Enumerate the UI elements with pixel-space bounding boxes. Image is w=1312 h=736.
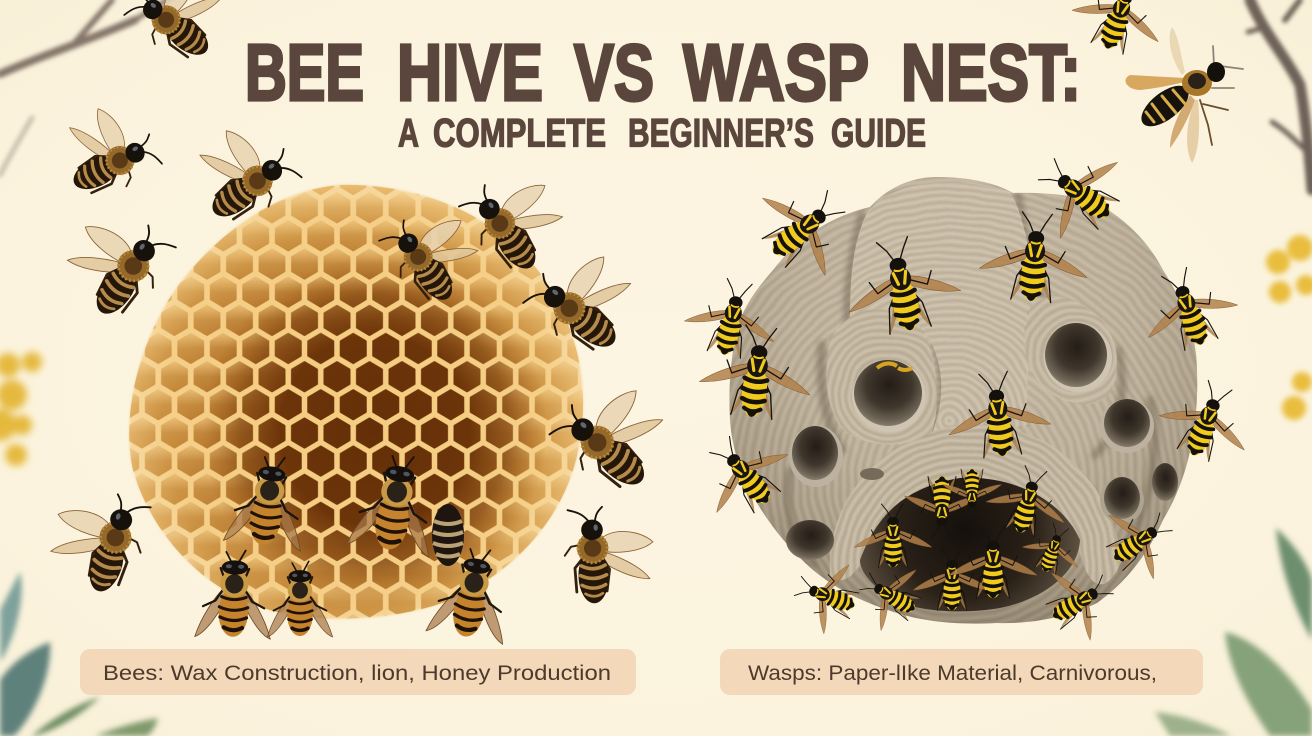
title line 1: WASP [683, 28, 869, 117]
wasp right edge [1130, 255, 1246, 361]
bee lower left [39, 479, 156, 600]
wasp bottom right [1034, 551, 1128, 650]
wasp left edge upper [679, 271, 785, 365]
title line 1: VS [574, 28, 654, 117]
bee lower right [563, 505, 655, 604]
right yellow flowers [1266, 235, 1312, 420]
left yellow flowers [0, 352, 42, 466]
nest mouth [860, 478, 1080, 611]
bee mid left [51, 196, 181, 328]
wasp upper centre right [977, 208, 1092, 306]
fibre rings over whole nest [725, 170, 1205, 630]
wasps [679, 0, 1263, 650]
bee bottom centre [267, 561, 333, 637]
wasp nest [725, 170, 1205, 630]
bottom-left leaves [0, 572, 158, 736]
caption: bees [80, 649, 636, 695]
bee top [120, 0, 241, 72]
insect flying top right [1125, 27, 1243, 163]
top-left blurred branches [0, 0, 175, 175]
wasp upper centre left [837, 229, 966, 341]
wasp lower right [1092, 491, 1189, 591]
left tube lobe [826, 309, 937, 445]
title line 2: BEGINNER’S [628, 112, 814, 156]
wasp left edge middle [696, 320, 817, 424]
title line 1: NEST: [901, 28, 1081, 117]
wasps in mouth [847, 458, 1089, 640]
bee abdomen on comb [432, 504, 464, 566]
bee right upper [519, 234, 651, 365]
title line 1 [245, 28, 1081, 117]
honey bees [39, 0, 684, 644]
top-right blurred branches [1248, 0, 1312, 190]
central dome lobe [850, 182, 1038, 440]
wasp nest top left [743, 163, 868, 292]
bee upper left centre [180, 110, 306, 234]
title line 2: A [398, 112, 419, 156]
nest holes [786, 323, 1178, 560]
wasp right edge lower [1150, 368, 1263, 472]
lobe shadows [788, 195, 1155, 565]
title line 2: GUIDE [831, 112, 926, 156]
wasp bottom left [785, 551, 867, 640]
title line 2: COMPLETE [433, 112, 606, 156]
bee on comb lower left [223, 451, 313, 551]
bee on comb lower middle [347, 449, 444, 557]
caption: wasps [720, 649, 1203, 695]
caption: bees: Bees: Wax Construction, lion, Honey Production [103, 662, 611, 685]
bee top of comb right [454, 157, 579, 283]
bee bottom left [195, 549, 273, 639]
title [245, 28, 1081, 156]
honeycomb [128, 184, 584, 620]
wasps peeking in hole [877, 363, 912, 370]
wasp left edge lower [685, 415, 803, 531]
lower lip band [830, 425, 1122, 584]
bottom-right leaves [1155, 528, 1312, 736]
bee bottom right [426, 542, 518, 644]
title line 2 [398, 112, 926, 156]
right tube lobe [1025, 297, 1117, 404]
title line 1: BEE [245, 28, 364, 117]
wasp flying top edge [1064, 0, 1176, 64]
wasp nest top right [1018, 131, 1137, 253]
title line 1: HIVE [397, 28, 543, 117]
hole rims [789, 324, 1154, 524]
bee upper left [49, 93, 166, 207]
caption: wasps: Wasps: Paper-lIke Material, Carnivorous, [748, 662, 1157, 685]
bee right lower [545, 365, 684, 503]
wasp centre [943, 367, 1054, 461]
bee on comb top [375, 193, 493, 313]
